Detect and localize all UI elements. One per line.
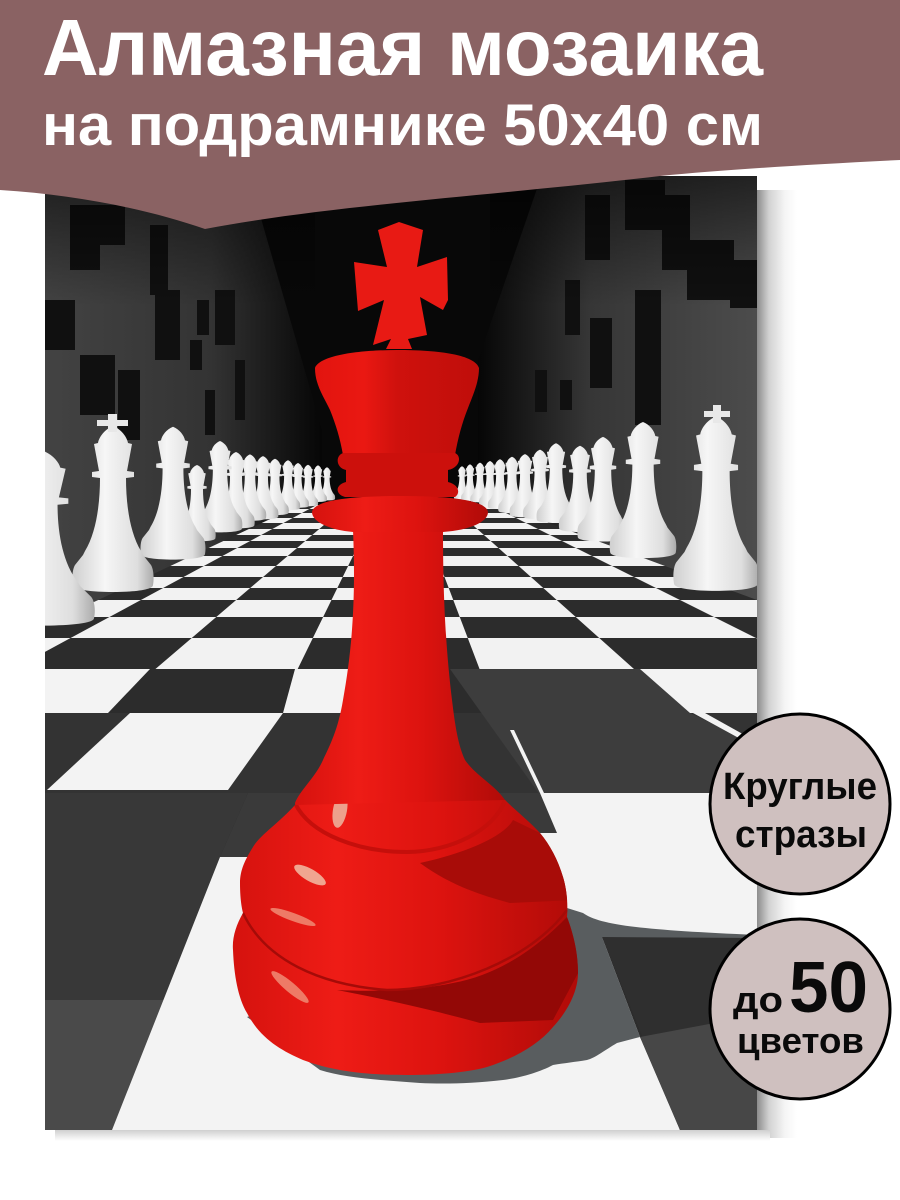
badge: round rhinestones: [710, 714, 890, 894]
left wall: [45, 194, 297, 602]
far rows B: [45, 509, 757, 669]
white pieces left row: [45, 414, 336, 626]
badge: up to 50 colours: 50: [789, 948, 868, 1028]
dark tile lower right: [602, 937, 757, 1130]
badge: up to 50 colours: до: [733, 979, 783, 1020]
king shadow: [247, 908, 757, 1084]
king stem: [295, 532, 505, 805]
king disc: [312, 496, 488, 532]
checkerboard floor: [45, 505, 757, 1130]
canvas side shadow: [55, 190, 797, 1141]
title: Алмазная мозаика: [42, 3, 763, 92]
king base shading: [243, 791, 585, 1023]
subtitle: на подрамнике 50х40 см: [42, 93, 763, 158]
right wall: [502, 176, 757, 600]
king cross: [354, 222, 448, 349]
top banner: [0, 0, 900, 229]
near white tiles: [45, 669, 757, 1130]
red king: [233, 222, 585, 1075]
badge: round rhinestones: стразы: [735, 814, 867, 856]
near dark tiles: [45, 669, 757, 1130]
king collar: [338, 453, 459, 497]
king base: [233, 800, 578, 1075]
white pieces right row: [454, 405, 759, 591]
badge: round rhinestones: Круглые: [723, 766, 877, 808]
artwork: chess king picture: [45, 176, 757, 1130]
king crown: [315, 350, 479, 455]
badge: up to 50 colours: [710, 919, 890, 1099]
badge: up to 50 colours: цветов: [737, 1020, 864, 1061]
far rows A: [70, 505, 756, 638]
